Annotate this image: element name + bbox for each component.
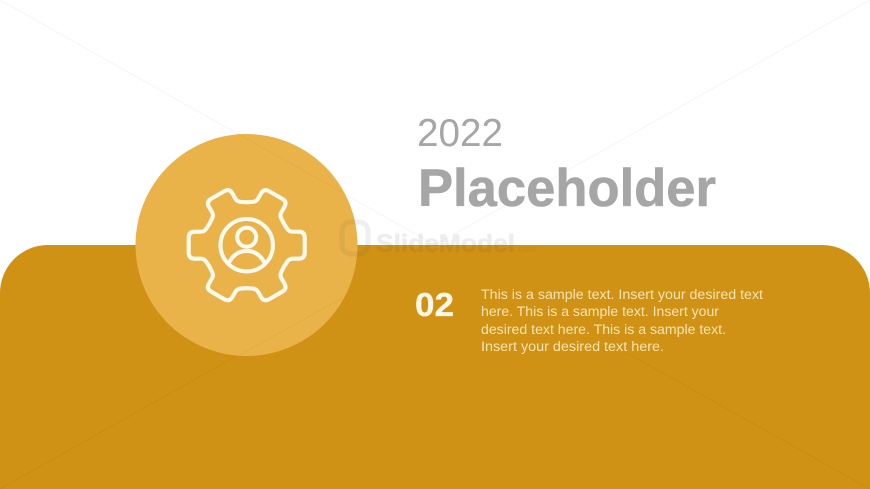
icon: gear with person <box>189 184 305 306</box>
body text <box>481 287 763 354</box>
title: Placeholder: Placeholder <box>418 159 716 218</box>
icon circle <box>136 134 358 356</box>
panel: gold band <box>0 245 870 489</box>
title year: 2022 <box>417 112 503 155</box>
body text: here. This is a sample text. Insert your <box>481 304 720 319</box>
body text: Insert your desired text here. <box>481 339 664 354</box>
watermark: .com <box>516 244 536 254</box>
number: 02 <box>415 286 454 323</box>
body text: desired text here. This is a sample text. <box>481 322 726 337</box>
body text: This is a sample text. Insert your desired text <box>481 287 763 302</box>
watermark <box>342 222 536 258</box>
watermark: SlideModel <box>376 230 515 258</box>
